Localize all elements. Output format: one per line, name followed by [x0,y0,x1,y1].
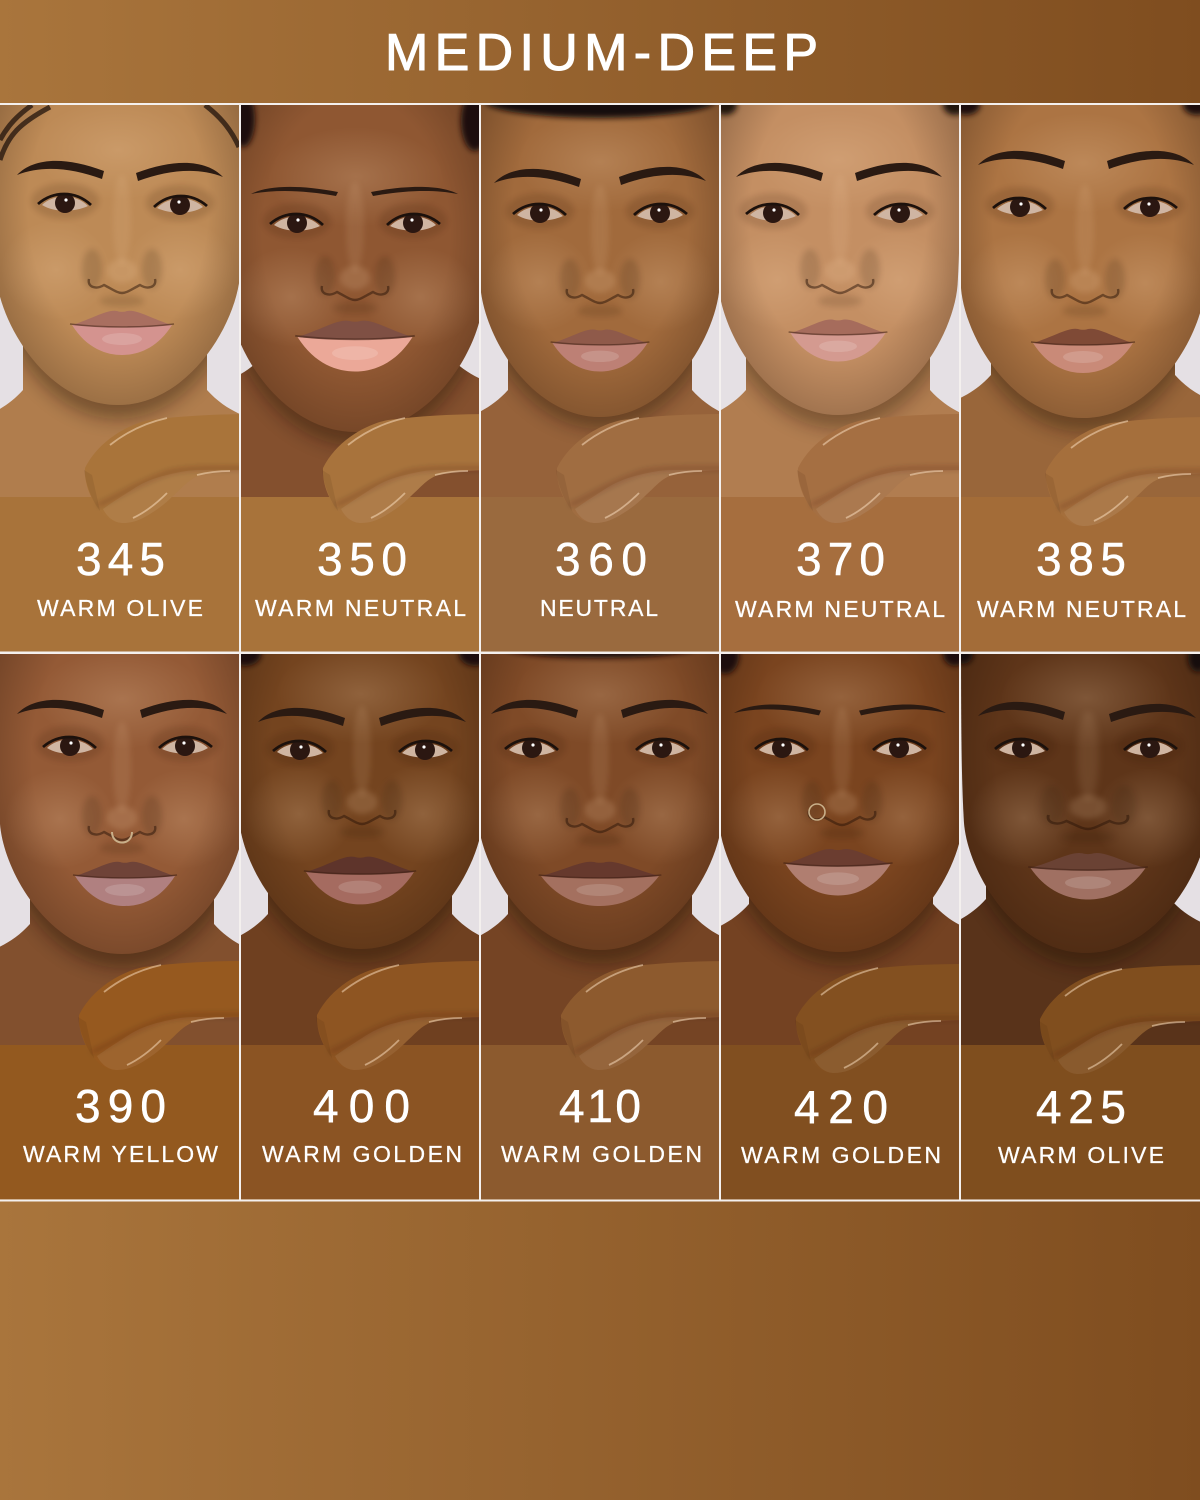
shade undertone: WARM NEUTRAL [735,596,945,622]
shade undertone: WARM OLIVE [37,595,203,621]
icon: septum ring [112,832,132,842]
panel: shade 390 warm yellow [0,654,239,1199]
title: MEDIUM-DEEP [385,24,818,82]
white grid lines [0,103,1200,1202]
shade number: 345 [76,533,165,585]
shade undertone: WARM OLIVE [998,1142,1164,1168]
shade undertone: WARM GOLDEN [262,1141,462,1167]
panel: shade 350 warm neutral [241,105,479,651]
shade number: 390 [75,1080,166,1132]
shade number: 385 [1036,533,1126,585]
shade number: 370 [796,533,885,585]
shade number: 425 [1036,1081,1126,1133]
panel: shade 400 warm golden [241,654,479,1199]
shade undertone: WARM GOLDEN [741,1142,941,1168]
panel: shade 360 neutral [481,105,719,651]
shade undertone: WARM NEUTRAL [255,595,466,621]
shade undertone: WARM NEUTRAL [977,596,1186,622]
shade number: 420 [794,1081,888,1133]
shade undertone: WARM GOLDEN [501,1141,702,1167]
shade number: 360 [555,533,647,585]
shade number: 400 [313,1080,410,1132]
panel: shade 425 warm olive [961,654,1200,1199]
panel: shade 385 warm neutral [961,105,1200,651]
panel: shade 370 warm neutral [721,105,959,651]
shade undertone: WARM YELLOW [23,1141,218,1167]
shade undertone: NEUTRAL [540,595,658,621]
panel: shade 420 warm golden [721,654,959,1199]
panel: shade 410 warm golden [481,654,719,1199]
panel: shade 345 warm olive [0,105,239,621]
icon: nose ring [809,804,825,820]
shade number: 350 [317,533,407,585]
shade number: 410 [559,1080,641,1132]
